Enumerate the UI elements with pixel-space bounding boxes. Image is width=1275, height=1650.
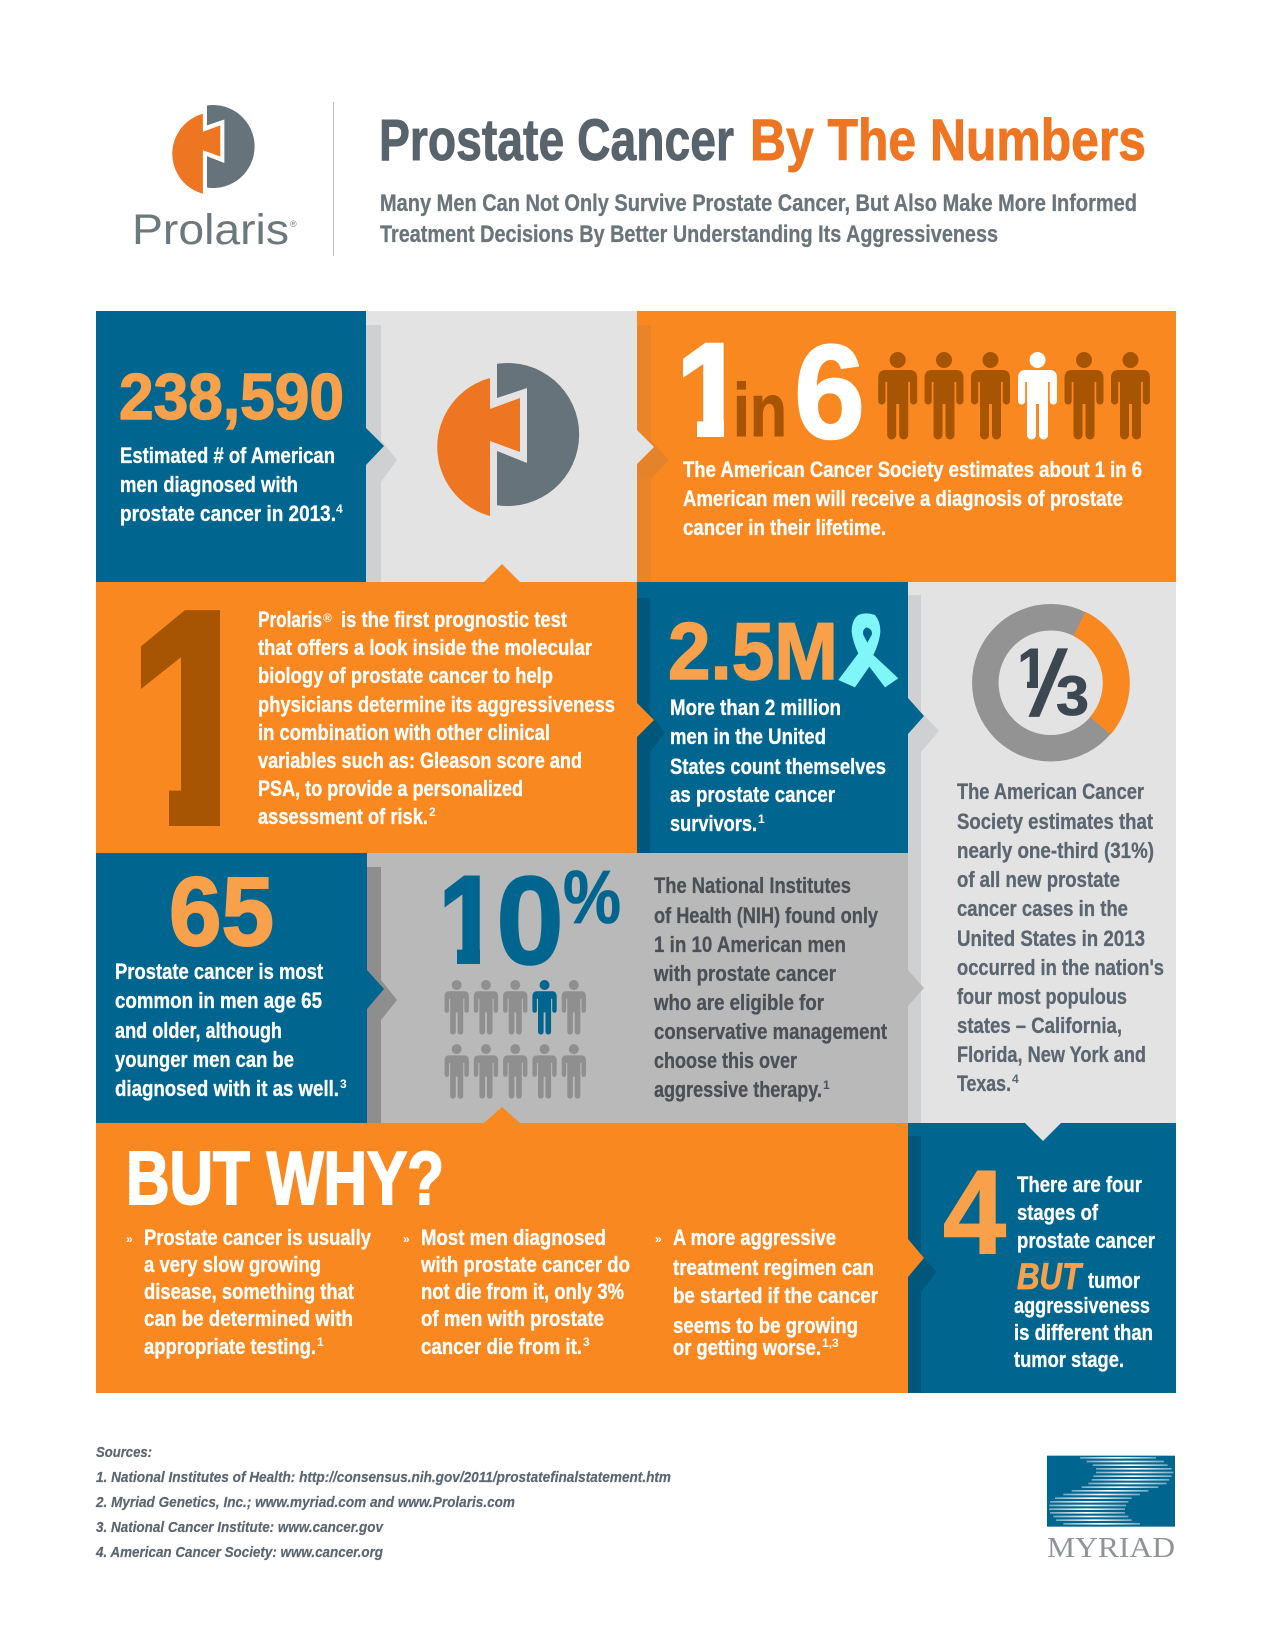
Prolaris wordmark: Prolaris bbox=[132, 206, 289, 254]
text: Prolaris description: PSA, to provide a personalized bbox=[258, 776, 523, 801]
text: survivors description bbox=[670, 695, 886, 836]
arrow: to 10 percent bbox=[367, 970, 384, 1009]
stat: one third: 1 bbox=[1018, 637, 1048, 701]
text: one third description: Texas. bbox=[957, 1071, 1011, 1096]
panel: but why bbox=[96, 1107, 924, 1393]
bullet column 1 bbox=[126, 1225, 372, 1359]
bullet column 3: » bbox=[655, 1232, 662, 1246]
stat: 1 in 6: 1 bbox=[676, 317, 744, 466]
stat: 10%: % bbox=[563, 855, 621, 939]
stat: one third: / bbox=[1023, 632, 1073, 735]
text: Prolaris description: biology of prostate cancer to help bbox=[258, 663, 553, 688]
text: 238,590 description: Estimated # of American bbox=[120, 443, 335, 468]
text: four stages description: tumor stage. bbox=[1014, 1347, 1124, 1372]
sources bbox=[95, 1444, 671, 1561]
text: one third description: The American Cancer bbox=[957, 779, 1144, 804]
header bbox=[132, 102, 1146, 256]
subtitle: Treatment Decisions By Better Understanding Its Aggressiveness bbox=[380, 221, 998, 248]
subtitle: Many Men Can Not Only Survive Prostate Cancer, But Also Make More Informed bbox=[380, 190, 1137, 217]
bullet column 2 bbox=[403, 1225, 630, 1359]
arrow: to 2.5M bbox=[637, 703, 654, 737]
bullet column 3: A more aggressive bbox=[673, 1225, 836, 1250]
icon: Myriad stripes bbox=[1047, 1456, 1175, 1527]
Myriad logo bbox=[1047, 1456, 1175, 1564]
panel: 1 in 6 bbox=[637, 311, 1176, 582]
arrow: up to logo bbox=[484, 564, 520, 582]
text: four stages description: BUT bbox=[1017, 1256, 1084, 1297]
arrow: up to 10 percent bbox=[484, 1107, 520, 1123]
header divider bbox=[333, 102, 334, 256]
text: NIH description: conservative management bbox=[654, 1019, 888, 1044]
text: 238,590 description bbox=[120, 443, 343, 526]
panel: 10 percent bbox=[367, 850, 924, 1123]
text: 238,590 description: prostate cancer in 2013. bbox=[120, 501, 336, 526]
sources: 4. American Cancer Society: www.cancer.org bbox=[95, 1544, 383, 1561]
stat: 10%: 1 bbox=[438, 850, 498, 991]
text: Prolaris description: variables such as: Gleason score and bbox=[258, 748, 582, 773]
bullet column 2: cancer die from it. bbox=[421, 1334, 582, 1359]
text: age 65 description: 3 bbox=[340, 1077, 347, 1091]
bullet column 3: be started if the cancer bbox=[673, 1283, 878, 1308]
chart: one third donut bbox=[985, 612, 1130, 748]
text: one third description bbox=[957, 779, 1164, 1096]
text: age 65 description: Prostate cancer is most bbox=[115, 959, 324, 984]
text: NIH description: 1 in 10 American men bbox=[654, 932, 846, 957]
text: Prolaris description: Prolaris bbox=[258, 607, 322, 632]
panel: 238,590 bbox=[96, 311, 384, 582]
text: 1 in 6 description bbox=[683, 457, 1142, 540]
sources: 3. National Cancer Institute: www.cancer.gov bbox=[96, 1519, 384, 1536]
text: one third description: occurred in the nation's bbox=[957, 955, 1164, 980]
stat: 1 in 6 bbox=[683, 342, 862, 440]
text: NIH description: who are eligible for bbox=[653, 990, 824, 1015]
text: NIH description: of Health (NIH) found only bbox=[654, 903, 879, 928]
text: NIH description: with prostate cancer bbox=[653, 961, 836, 986]
text: one third description: states – California, bbox=[957, 1013, 1122, 1038]
panel: four stages bbox=[908, 1123, 1176, 1393]
text: one third description: Society estimates that bbox=[957, 809, 1154, 834]
arrow: to 1 in 6 bbox=[637, 430, 654, 464]
text: Prolaris description bbox=[258, 607, 615, 829]
title bbox=[379, 108, 1146, 173]
text: Prolaris description: in combination with other clinical bbox=[258, 720, 550, 745]
text: survivors description: as prostate cancer bbox=[670, 782, 835, 807]
text: four stages description: stages of bbox=[1017, 1200, 1099, 1225]
bullet column 2: 3 bbox=[583, 1335, 590, 1349]
icon: Prolaris logo bbox=[172, 105, 255, 194]
bullet column 3: 1,3 bbox=[822, 1336, 839, 1350]
text: NIH description: aggressive therapy. bbox=[654, 1077, 822, 1102]
panel: age 65 bbox=[96, 853, 384, 1123]
text: survivors description: men in the United bbox=[670, 724, 826, 749]
arrow: to four stages bbox=[908, 1239, 924, 1277]
stat: 1 in 6: in bbox=[733, 368, 787, 452]
text: survivors description: States count themselves bbox=[670, 754, 886, 779]
text: Prolaris description: is the first prognostic test bbox=[341, 607, 568, 632]
text: Prolaris description: 2 bbox=[429, 805, 436, 819]
bullet column 3: seems to be growing bbox=[673, 1313, 858, 1338]
bullet column 1: disease, something that bbox=[144, 1279, 355, 1304]
bullet column 2: » bbox=[403, 1232, 410, 1246]
text: 1 in 6 description: cancer in their lifetime. bbox=[683, 515, 886, 540]
text: four stages description: tumor bbox=[1088, 1268, 1140, 1293]
stat: 4: 4 bbox=[943, 1146, 1006, 1279]
bullet column 1: appropriate testing. bbox=[144, 1334, 316, 1359]
text: survivors description: More than 2 million bbox=[670, 695, 841, 720]
Myriad wordmark: MYRIAD bbox=[1047, 1532, 1175, 1564]
text: age 65 description: and older, although bbox=[115, 1018, 282, 1043]
text: four stages description: There are four bbox=[1017, 1172, 1142, 1197]
text: one third description: United States in 2013 bbox=[957, 926, 1145, 951]
stat: 2.5M: 2.5M bbox=[668, 607, 838, 697]
stat: 238,590: 238,590 bbox=[119, 360, 344, 433]
panel: Prolaris first test bbox=[96, 564, 654, 853]
text: NIH description: The National Institutes bbox=[654, 873, 851, 898]
arrow: to one third bbox=[908, 698, 924, 734]
sources: 1. National Institutes of Health: http://consensus.nih.gov/2011/prostatefinalstatement.htm bbox=[96, 1469, 671, 1486]
text: Prolaris description: that offers a look inside the molecular bbox=[258, 635, 592, 660]
stat: one third bbox=[1020, 648, 1088, 717]
bullet column 2: Most men diagnosed bbox=[421, 1225, 606, 1250]
text: age 65 description: younger men can be bbox=[115, 1047, 294, 1072]
text: one third description: of all new prostate bbox=[957, 867, 1120, 892]
stat: one third: 3 bbox=[1056, 664, 1089, 727]
stat: 10%: 0 bbox=[496, 852, 564, 991]
bullet column 1: can be determined with bbox=[144, 1306, 353, 1331]
sources: 2. Myriad Genetics, Inc.; www.myriad.com and www.Prolaris.com bbox=[95, 1494, 515, 1511]
title: By The Numbers bbox=[750, 108, 1146, 173]
text: Prolaris description: assessment of risk. bbox=[258, 804, 428, 829]
icon: large Prolaris logo bbox=[437, 363, 579, 516]
bullet column 3: treatment regimen can bbox=[673, 1255, 874, 1280]
text: four stages description: aggressiveness bbox=[1014, 1293, 1150, 1318]
text: one third description: Florida, New York and bbox=[957, 1042, 1146, 1067]
text: survivors description: survivors. bbox=[670, 811, 757, 836]
bullet column 2: not die from it, only 3% bbox=[421, 1279, 624, 1304]
panel: 2.5M survivors bbox=[637, 582, 924, 853]
panel: one third bbox=[908, 582, 1176, 1141]
bullet column 1: Prostate cancer is usually bbox=[144, 1225, 372, 1250]
stat: 65: 65 bbox=[169, 857, 274, 966]
text: age 65 description: diagnosed with it as well. bbox=[115, 1076, 339, 1101]
text: 1 in 6 description: American men will receive a diagnosis of prostate bbox=[683, 486, 1123, 511]
text: Prolaris description: physicians determine its aggressiveness bbox=[258, 692, 615, 717]
icon: awareness ribbon bbox=[838, 613, 898, 687]
text: four stages description bbox=[1014, 1172, 1155, 1372]
icon: six men bbox=[878, 352, 1150, 439]
bullet column 3: or getting worse. bbox=[673, 1335, 821, 1360]
text: age 65 description: common in men age 65 bbox=[115, 988, 322, 1013]
bullet column 2: with prostate cancer do bbox=[420, 1252, 630, 1277]
bullet column 2: of men with prostate bbox=[421, 1306, 604, 1331]
bullet column 1: 1 bbox=[317, 1335, 324, 1349]
text: 238,590 description: men diagnosed with bbox=[120, 472, 298, 497]
title: Prostate Cancer bbox=[379, 108, 734, 173]
text: NIH description bbox=[653, 873, 888, 1102]
arrow: to one third bbox=[908, 970, 924, 1006]
bullet column 1: a very slow growing bbox=[144, 1252, 321, 1277]
stat: big 1: 1 bbox=[128, 548, 262, 892]
panel: logo centre bbox=[366, 311, 654, 582]
text: survivors description: 1 bbox=[758, 812, 765, 826]
text: Prolaris description: ® bbox=[323, 611, 332, 625]
text: four stages description: prostate cancer bbox=[1017, 1228, 1155, 1253]
Prolaris wordmark: ® bbox=[290, 219, 297, 229]
sources: Sources: bbox=[96, 1444, 152, 1461]
text: 1 in 6 description: The American Cancer Society estimates about 1 in 6 bbox=[683, 457, 1142, 482]
text: one third description: four most populous bbox=[957, 984, 1127, 1009]
arrow: to logo bbox=[366, 428, 384, 465]
text: one third description: nearly one-third (31%) bbox=[957, 838, 1154, 863]
text: one third description: 4 bbox=[1012, 1072, 1019, 1086]
bullet column 1: » bbox=[126, 1232, 133, 1246]
arrow: to four stages bbox=[1025, 1123, 1061, 1141]
stat: 1 in 6: 6 bbox=[794, 318, 865, 467]
text: four stages description: is different than bbox=[1014, 1320, 1153, 1345]
icon: ten men bbox=[445, 980, 586, 1099]
text: one third description: cancer cases in the bbox=[957, 896, 1128, 921]
stat: 10% bbox=[444, 870, 620, 966]
subtitle bbox=[380, 190, 1137, 248]
heading: but why: BUT WHY? bbox=[126, 1136, 444, 1220]
text: NIH description: 1 bbox=[823, 1078, 830, 1092]
text: 238,590 description: 4 bbox=[336, 502, 343, 516]
text: NIH description: choose this over bbox=[654, 1048, 797, 1073]
text: age 65 description bbox=[115, 959, 347, 1101]
bullet column 3 bbox=[655, 1225, 878, 1360]
